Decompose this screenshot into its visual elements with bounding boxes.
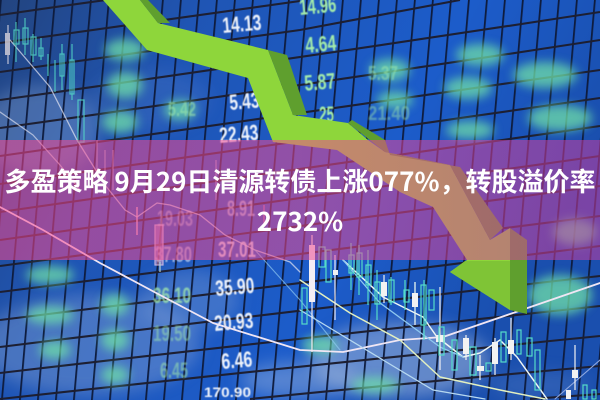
green number labels: 36.10 bbox=[153, 283, 191, 308]
white number labels: 8.91 bbox=[227, 196, 255, 221]
white number labels: 5.43 bbox=[228, 87, 260, 115]
white number labels: 37.80 bbox=[155, 242, 192, 267]
green number labels: 6.45 bbox=[160, 358, 188, 383]
translucent magenta title band bbox=[0, 140, 600, 260]
green number labels: 19.50 bbox=[153, 321, 191, 346]
white number labels: 20.93 bbox=[213, 308, 254, 336]
green number labels: 5.87 bbox=[303, 68, 336, 96]
green number labels: 5.42 bbox=[168, 99, 196, 121]
white number labels bbox=[155, 10, 262, 400]
green number labels: 21.40 bbox=[368, 103, 410, 125]
white number labels: 22.43 bbox=[218, 120, 259, 148]
title: 多盈策略 9月29日清源转债上涨077%，转股溢价率 bbox=[4, 162, 595, 199]
white number labels: 19.03 bbox=[157, 206, 193, 231]
title: 2732% bbox=[257, 202, 343, 239]
title bbox=[4, 162, 595, 239]
arrow shaft and head light face bbox=[103, 0, 510, 310]
icon: falling green arrow bbox=[103, 0, 527, 314]
arrow head lower tint bbox=[450, 261, 510, 310]
arrow dark side faces bbox=[140, 0, 527, 314]
green number labels: 5.37 bbox=[368, 63, 398, 85]
white number labels: 37.01 bbox=[218, 237, 256, 262]
white number labels: 35.90 bbox=[214, 273, 255, 301]
green number labels bbox=[153, 0, 410, 383]
white number labels: 14.13 bbox=[221, 10, 262, 38]
white number labels: 6.46 bbox=[220, 346, 253, 374]
candlesticks right bbox=[302, 235, 596, 399]
candlesticks upper left bbox=[5, 18, 264, 272]
white number labels: 170.90 bbox=[204, 384, 251, 400]
green number labels: 25 bbox=[319, 102, 334, 127]
green number labels: 4.64 bbox=[304, 30, 338, 58]
